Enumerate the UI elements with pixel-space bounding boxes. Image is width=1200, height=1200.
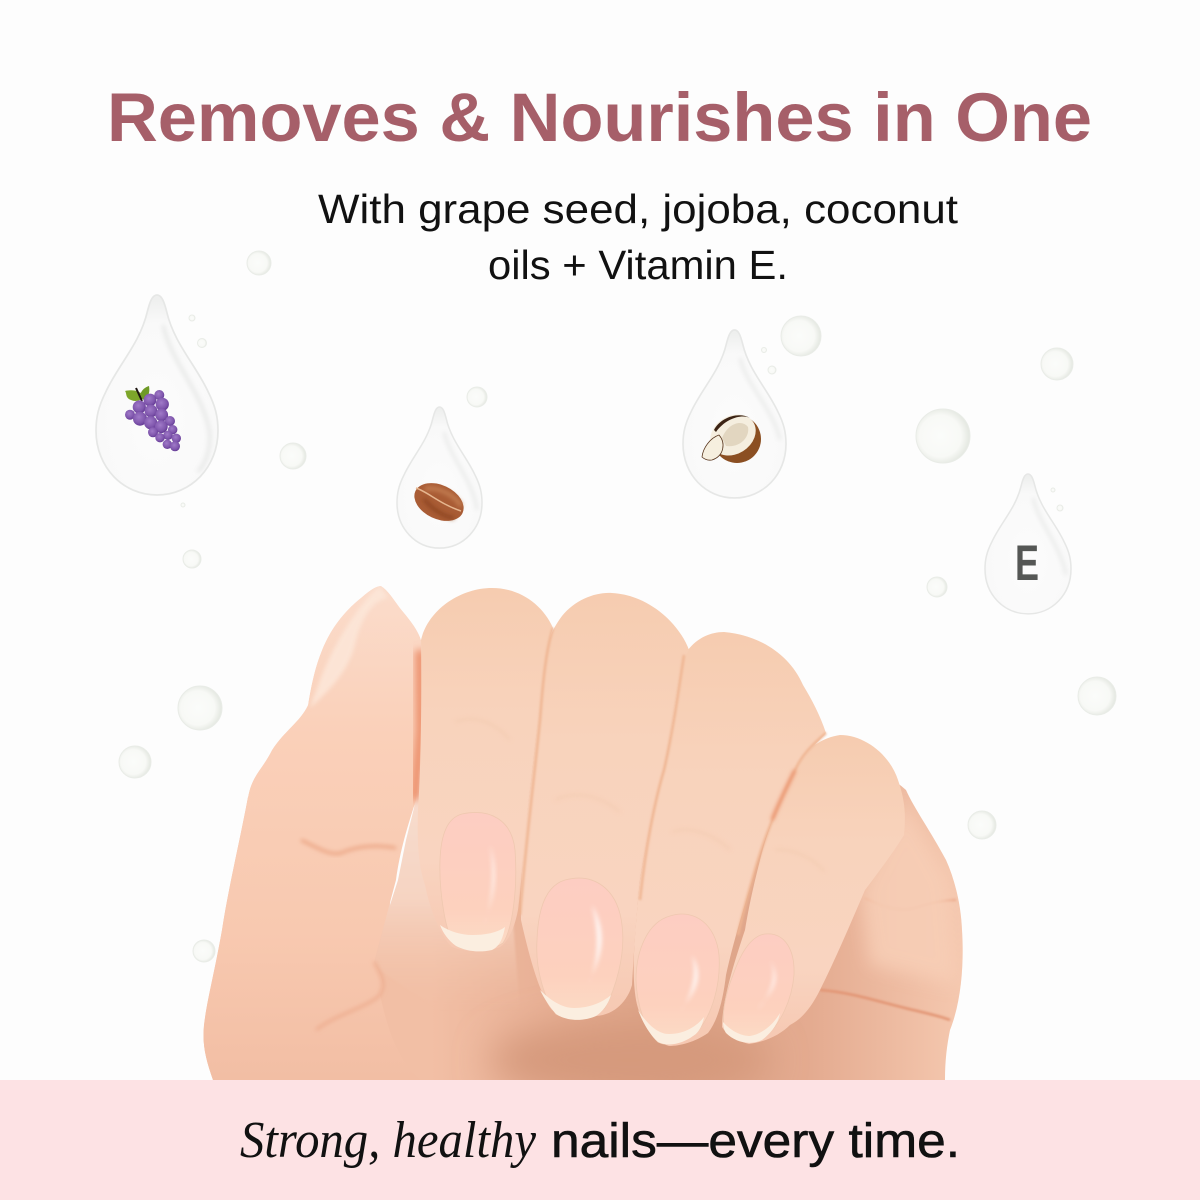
free edge [540, 990, 611, 1020]
tagline: nails—every time. [551, 1115, 960, 1168]
right hand creases [943, 898, 956, 902]
free edge [723, 1013, 780, 1043]
icon: grapes [125, 386, 181, 451]
knuckle lines [455, 719, 825, 872]
palm shadow under fingers [487, 1018, 759, 1080]
palm [203, 700, 963, 1080]
web crease [316, 962, 383, 1030]
thumb nail edge highlight [310, 586, 388, 708]
ring finger [634, 632, 826, 1046]
drop: grape seed [96, 295, 218, 495]
thumb crease [301, 840, 396, 854]
subtitle: With grape seed, jojoba, coconut [318, 186, 959, 232]
finger seams [520, 628, 826, 935]
highlight [680, 955, 698, 1012]
shadow between ring and pinky [772, 770, 795, 820]
drop: vitamin E [985, 474, 1071, 614]
highlight [588, 905, 602, 985]
bottom banner [0, 1080, 1200, 1200]
water bubbles [119, 251, 1116, 962]
hand [200, 586, 963, 1100]
drop: coconut [683, 330, 786, 498]
nail: ring [636, 914, 719, 1044]
tagline [240, 1112, 960, 1169]
index finger [418, 588, 553, 951]
highlight [758, 960, 776, 1010]
sliver of palm behind thumb [377, 759, 516, 972]
tagline: Strong, healthy [240, 1112, 537, 1169]
letter E: E [1015, 535, 1039, 591]
free edge [440, 925, 505, 951]
icon: jojoba seed [408, 476, 470, 528]
middle finger [521, 593, 689, 1019]
nail: index [440, 812, 516, 951]
free edge [638, 1010, 704, 1044]
back of hand light [858, 812, 956, 976]
nail: middle [537, 878, 623, 1020]
subtitle: oils + Vitamin E. [488, 242, 788, 288]
thumb [200, 586, 423, 1080]
highlight [484, 845, 495, 925]
thumb shadow [415, 650, 421, 800]
icon: coconut [702, 406, 763, 464]
drop: jojoba [397, 407, 482, 548]
white gap between thumb and palm [390, 805, 414, 904]
title: Removes & Nourishes in One [107, 79, 1092, 156]
pinky finger [722, 735, 905, 1044]
subtitle [318, 186, 959, 288]
nail: pinky [723, 934, 794, 1043]
